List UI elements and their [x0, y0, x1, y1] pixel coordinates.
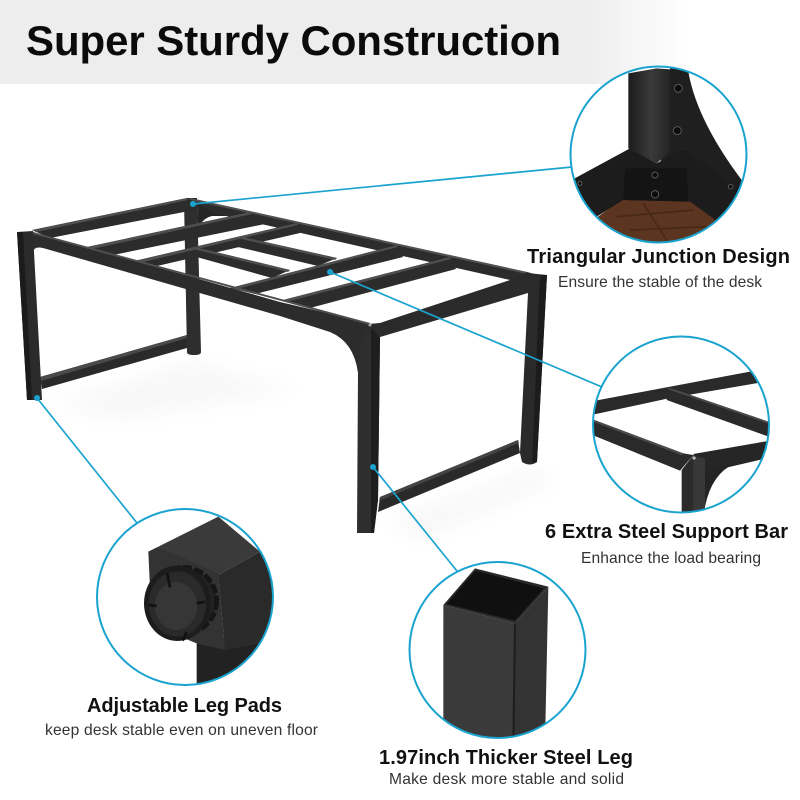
connector to support bar	[327, 269, 602, 387]
label: leg pads	[45, 695, 318, 739]
front rail	[590, 418, 693, 471]
right face	[513, 587, 548, 743]
label: steel leg: 1.97inch Thicker Steel Leg	[379, 747, 633, 769]
steel desk frame	[17, 198, 547, 533]
label: steel leg: Make desk more stable and solid	[389, 771, 624, 788]
label: support bar: Enhance the load bearing	[581, 550, 761, 567]
end plate	[148, 547, 225, 650]
callout: triangular junction	[567, 66, 750, 247]
callout: leg pad	[97, 509, 280, 690]
label: triangular junction	[527, 246, 790, 291]
tube opening	[443, 568, 548, 623]
left front leg	[17, 231, 42, 400]
right rail	[693, 441, 770, 473]
inner longitudinal bar 2	[238, 237, 337, 266]
support bar 3	[230, 245, 403, 294]
inner bar	[666, 394, 768, 436]
gusset	[705, 467, 728, 506]
label: steel leg	[379, 747, 633, 788]
gusset plate	[660, 67, 742, 182]
connector lines	[34, 167, 602, 571]
right top rail	[368, 272, 542, 337]
label: support bar	[545, 521, 788, 567]
support bar 1	[87, 212, 265, 255]
label: triangular junction: Ensure the stable of the desk	[558, 274, 762, 291]
back right leg	[520, 273, 547, 464]
tube right face	[218, 552, 272, 637]
label: triangular junction: Triangular Junction Design	[527, 246, 790, 268]
support bar 2	[130, 223, 300, 266]
label: leg pads: Adjustable Leg Pads	[87, 695, 282, 717]
back left leg	[184, 198, 201, 355]
title band	[0, 0, 800, 84]
callout: support bar	[590, 336, 773, 517]
support bar 4	[283, 257, 456, 308]
connector to leg pad	[34, 395, 137, 523]
cross bar	[590, 372, 760, 415]
adjustable pad	[178, 565, 219, 633]
label: support bar: 6 Extra Steel Support Bar	[545, 521, 788, 543]
corner rails	[574, 148, 742, 220]
bolts	[578, 84, 733, 198]
front right leg	[357, 325, 380, 533]
back right lower rail	[378, 440, 520, 512]
inner longitudinal bar 1	[193, 247, 290, 278]
tube lower section	[196, 636, 258, 684]
post	[628, 68, 670, 163]
wood top	[598, 200, 716, 242]
tube top face	[158, 517, 260, 575]
connector to triangular junction	[190, 167, 572, 207]
callout: steel leg	[410, 562, 586, 743]
label: leg pads: keep desk stable even on uneven floor	[45, 722, 318, 739]
back gusset	[197, 203, 232, 232]
floor shadow	[50, 362, 560, 540]
title: Super Sturdy Construction	[26, 17, 561, 64]
connector to steel leg	[370, 464, 457, 571]
post	[682, 455, 696, 512]
left top rail	[32, 198, 197, 238]
bolt hole	[368, 324, 372, 326]
left lower rail	[40, 335, 187, 389]
front long rail	[33, 232, 370, 373]
front face	[443, 605, 515, 743]
back long rail	[190, 198, 530, 283]
